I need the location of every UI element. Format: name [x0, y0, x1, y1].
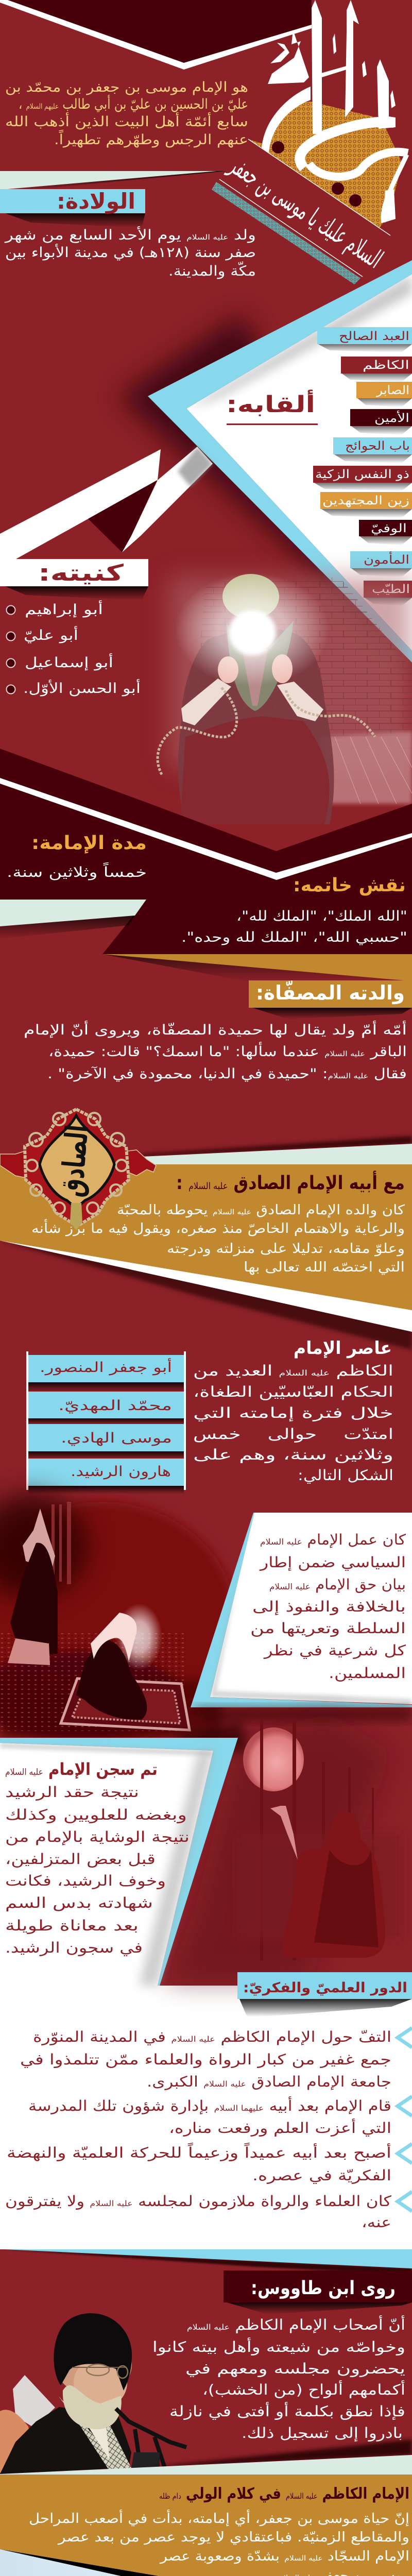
- image: women praying in night: [0, 1494, 237, 1744]
- titles: list of labels: الوفيّ: [371, 522, 407, 535]
- text: political work: كان عمل الإمام عليه السلام: [260, 1531, 406, 1548]
- text: seal: [181, 908, 407, 945]
- text: imamate duration: خمساً وثلاثين سنة.: [7, 862, 147, 880]
- text: birth body: مكّة والمدينة.: [168, 261, 256, 279]
- text: scholarly role list: جامعة الإمام الصادق عليه السلام الكبرى.: [147, 2073, 391, 2090]
- panel: political work: [191, 1513, 412, 1721]
- text: imprisonment: بعد معاناة طويلة: [5, 1917, 139, 1934]
- panel: scholarly role: [5, 1972, 412, 2231]
- kunya list: أبو عليّ: [24, 625, 78, 643]
- text: scholarly role list: الفكريّة في عصره.: [252, 2167, 391, 2184]
- text: mother: [24, 1020, 407, 1082]
- text: seal: "الله الملك"، "الملك لله"،: [236, 908, 407, 924]
- text: mother: أمّه أمّ ولد يقال لها حميدة المصفّاة، ويروى أنّ الإمام: [24, 1020, 407, 1038]
- kunya list: [23, 600, 141, 697]
- text: Ibn Tawus: يحضرون مجلسه ومعهم في: [185, 2360, 405, 2377]
- text: Ibn Tawus: وخواصّه من شيعته وأهل بيته كانوا: [152, 2337, 405, 2355]
- text: imprisonment: قبل بعض المتزلفين،: [5, 1851, 156, 1868]
- panel: in the words of the Leader: [0, 2439, 412, 2576]
- heading: Ibn Tawus: روى ابن طاووس:: [251, 2278, 396, 2299]
- text: mother: الباقر عليه السلام عندما سألها: "ما اسمك؟" قالت: حميدة،: [48, 1041, 407, 1060]
- titles: list of labels: الأمين: [374, 411, 409, 425]
- text: imprisonment: نتيجة الوشاية بالإمام من: [5, 1828, 190, 1845]
- panel: imprisonment: [0, 1738, 238, 1986]
- text: rulers: الحكام العبّاسيّين الطغاة،: [193, 1383, 393, 1400]
- kunya list: أبو إبراهيم: [25, 600, 103, 618]
- text: Ibn Tawus: أكمامهم ألواح (من الخشب)،: [202, 2380, 405, 2398]
- panel: titles chevron: [118, 260, 412, 665]
- text: imprisonment: وخوف الرشيد، فكانت: [5, 1872, 166, 1889]
- icons: blue chevrons: [398, 2028, 412, 2211]
- text: rulers: خلال فترة إمامته التي: [193, 1404, 393, 1421]
- image: imam praying in chains: [158, 573, 412, 824]
- heading: mother: والدته المصفّاة:: [256, 980, 405, 1005]
- text: with his father: والرعاية والاهتمام الخاصّ منذ صغره، ويقول فيه ما برز شأنه: [31, 1218, 405, 1236]
- titles: list of labels: باب الحوائج: [345, 439, 410, 453]
- titles: list of labels: الكاظم: [363, 359, 409, 372]
- heading: birth: الولادة:: [57, 189, 135, 214]
- panel: birth: [0, 171, 227, 228]
- text: with his father: [31, 1202, 405, 1275]
- text: scholarly role list: أصبح بعد أبيه عميداً وزعيماً للحركة العلميّة والنهضة: [7, 2142, 391, 2161]
- background: white scholarly section: [0, 1986, 412, 2249]
- titles: list of labels: زين المجتهدين: [322, 494, 409, 507]
- kunya list: أبو إسماعيل: [25, 653, 113, 671]
- heading: kunya: كنيته:: [38, 560, 124, 586]
- text: birth body: [4, 226, 256, 279]
- titles: list of labels: [313, 327, 412, 606]
- text: political work: السلطة وتعريتها من: [250, 1620, 406, 1637]
- icon: Imam Sadiq emblem: [0, 1109, 156, 1230]
- text: scholarly role list: جمع غفير من كبار الرواة والعلماء ممّن تتلمذوا في: [20, 2051, 391, 2068]
- text: imprisonment: [5, 1784, 190, 1956]
- text: birth body: صفر سنة (١٢٨هـ) في مدينة الأبواء بين: [5, 243, 256, 261]
- text: Ibn Tawus: بادروا إلى تسجيل ذلك.: [242, 2425, 403, 2442]
- titles: list of labels: المأمون: [364, 551, 409, 567]
- heading: scholarly role: الدور العلميّ والفكريّ:: [243, 1980, 407, 1996]
- intro text: [5, 79, 248, 148]
- text: political work: كل شرعية في نظر: [263, 1642, 406, 1659]
- text: political work: المسلمين.: [329, 1665, 406, 1682]
- titles: list of labels: العبد الصالح: [339, 330, 409, 343]
- intro text: سابع أئمّة أهل البيت الذين أذهب الله: [5, 112, 248, 130]
- text: seal: "حسبي الله"، "الملك لله وحده".: [181, 929, 407, 945]
- text: Leader: والمقاطع الزمنيّة. فباعتقادي لا يوجد عصر من بعد عصر: [57, 2530, 409, 2545]
- text: rulers: [193, 1362, 393, 1484]
- text: rulers: الكاظم عليه السلام العديد من: [193, 1362, 393, 1379]
- text: rulers: وثلاثين سنة، وهم على: [193, 1446, 393, 1463]
- background: red page field: [0, 0, 412, 1986]
- heading: imamate duration: مدة الإمامة:: [31, 833, 147, 854]
- rulers list: أبو جعفر المنصور.: [40, 1358, 172, 1376]
- text: political work: بالخلافة والنفوذ إلى: [252, 1598, 406, 1615]
- rulers list: [26, 1351, 186, 1494]
- heading: titles: ألقابه:: [226, 389, 315, 418]
- background: red Ibn Tawus section: [0, 2249, 412, 2481]
- text: scholarly role list: عنه،: [362, 2214, 391, 2231]
- panel: with his father: [0, 1109, 412, 1350]
- text: imprisonment: شهادته بدس السم: [5, 1894, 153, 1911]
- rulers list: محمّد المهديّ.: [58, 1398, 172, 1414]
- text: Ibn Tawus: [152, 2315, 405, 2442]
- text: birth body: ولد عليه السلام يوم الأحد السابع من شهر: [4, 226, 256, 243]
- rulers list: هارون الرشيد.: [71, 1464, 171, 1480]
- text: Leader: الإمام السجّاد عليه السلام بشدّة وصعوبة عصر: [159, 2549, 409, 2564]
- text: rulers: امتدّت حوالى خمس: [193, 1426, 393, 1443]
- text: political work: السياسي ضمن إطار: [259, 1554, 406, 1571]
- text: Leader: [29, 2509, 409, 2576]
- text: scholarly role list: كان العلماء والرواة ملازمون لمجلسه عليه السلام ولا يفترقون: [5, 2193, 392, 2210]
- panel: kunya: [0, 559, 148, 697]
- rulers list: موسى الهادي.: [61, 1430, 172, 1446]
- text: with his father: وعلوّ مقامه، تدليلا على منزلته ودرجته: [167, 1241, 405, 1257]
- heading: seal: نقش خاتمه:: [293, 875, 406, 896]
- intro text: عنهم الرجس وطهّرهم تطهيراً.: [54, 129, 248, 148]
- icon: calligraphy emblem: [212, 0, 408, 284]
- text: imprisonment: في سجون الرشيد.: [5, 1939, 143, 1956]
- image: prison bars and moon: [165, 1713, 402, 1984]
- text: political work: بيان حق الإمام عليه السلام: [269, 1576, 406, 1593]
- titles: list of labels: الصابر: [376, 384, 409, 397]
- text: imprisonment: نتيجة حقد الرشيد: [5, 1784, 139, 1801]
- kunya list: أبو الحسن الأوّل.: [23, 679, 141, 697]
- panel: contemporary rulers: [26, 1338, 393, 1494]
- text: scholarly role list: التي أعزت العلم ورفعت مناره،: [169, 2118, 391, 2137]
- text: Ibn Tawus: أنّ أصحاب الإمام الكاظم عليه السلام: [187, 2315, 405, 2333]
- titles: list of labels: الطيّب: [372, 583, 410, 596]
- intro text: هو الإمام موسى بن جعفر بن محمّد بن: [5, 79, 248, 95]
- text: mother: فقال عليه السلام: "حميدة في الدنيا، محمودة في الآخرة" .: [47, 1066, 407, 1082]
- icon: Imam Sadiq emblem: الصادق: [54, 1123, 96, 1198]
- text: scholarly role list: قام الإمام بعد أبيه عليهما السلام بإدارة شؤون تلك المدرسة: [28, 2096, 391, 2114]
- heading: rulers: عاصر الإمام: [294, 1338, 392, 1359]
- panel: imamate and seal: [0, 749, 412, 954]
- text: with his father: التي اختصّه الله تعالى بها: [244, 1260, 405, 1275]
- text: Leader: إنّ حياة موسى بن جعفر، أي إمامته، بدأت في أصعب المراحل: [29, 2509, 409, 2527]
- text: Ibn Tawus: فإذا نطق بكلمة أو أفتى في نازلة: [169, 2401, 405, 2420]
- titles: list of labels: ذو النفس الزكية: [315, 468, 409, 481]
- text: scholarly role list: التفّ حول الإمام الكاظم عليه السلام في المدينة المنوّرة: [33, 2028, 391, 2045]
- panel: mother: [24, 954, 412, 1082]
- intro text: عليّ بن الحسين بن عليّ بن أبي طالب عليهم السلام ،: [19, 94, 248, 112]
- text: imprisonment: وبغضه للعلويين وكذلك: [5, 1806, 187, 1823]
- decoration: white stripes and dark triangle: [0, 447, 213, 559]
- text: scholarly role list: [5, 2028, 392, 2231]
- background: sky: [0, 2549, 412, 2576]
- heading: imprisonment: تم سجن الإمام عليه السلام: [5, 1759, 158, 1779]
- top chevron: [0, 0, 312, 70]
- text: rulers: الشكل التالي:: [298, 1467, 393, 1484]
- text: with his father: كان والده الإمام الصادق عليه السلام يحوطه بالمحبّة: [117, 1202, 405, 1218]
- image: speaker portrait: [0, 2313, 186, 2474]
- text: political work: [250, 1531, 406, 1682]
- panel: Ibn Tawus: [5, 2249, 412, 2442]
